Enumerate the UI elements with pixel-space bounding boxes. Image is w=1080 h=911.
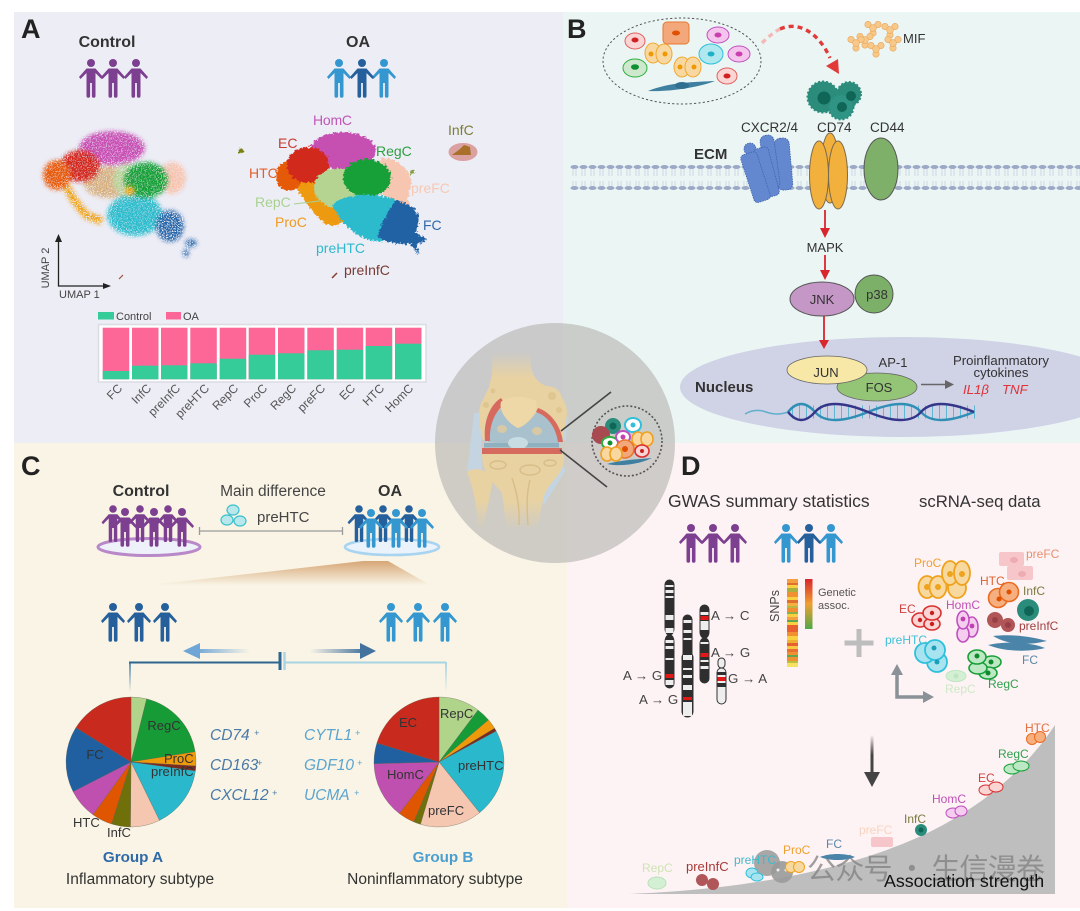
cell: HomC (946, 598, 980, 642)
rank: ProC: ProC (783, 843, 811, 857)
UMAP cluster labels: EC (278, 135, 297, 151)
arrows: pathway (820, 210, 830, 342)
legend: Control (116, 311, 151, 323)
receptor labels: CD74 (817, 120, 852, 135)
pie labels: group A: InfC (107, 825, 131, 840)
cell: RepC (945, 670, 976, 696)
label: MAPK: MAPK (807, 240, 844, 255)
UMAP cluster labels: preHTC (316, 240, 365, 256)
lines to cell cluster (560, 392, 611, 487)
UMAP axes (40, 234, 111, 301)
complex: AP-1 (787, 355, 917, 401)
icon: group B people (379, 603, 457, 642)
pie labels: group B: preHTC (458, 758, 504, 773)
complex: AP-1: AP-1 (879, 355, 907, 370)
UMAP cluster labels: FC (423, 217, 442, 233)
femur texture (483, 388, 562, 413)
dashed cell cluster (603, 18, 761, 104)
ranked cell types on curve (642, 721, 1050, 890)
watermark: 公众号 · 生信漫卷 (807, 846, 1045, 888)
panel letter B: B (567, 14, 586, 44)
UMAP axes: UMAP 1 (59, 289, 100, 301)
rank: preFC: preFC (859, 823, 893, 837)
ligaments (467, 413, 568, 505)
text: proinflammatory cytokines (953, 353, 1049, 380)
UMAP cluster labels: preFC (411, 180, 450, 196)
icon: control people (79, 59, 148, 98)
label: MIF: MIF (903, 31, 925, 46)
cell: RegC (968, 650, 1019, 691)
heading: Control: Control (113, 483, 169, 500)
gene list: group B: UCMA (304, 787, 350, 804)
cell: ProC: ProC (914, 556, 942, 570)
panel B: signalling pathway (567, 14, 1080, 437)
label: Noninflammatory subtype: Noninflammatory subtype (347, 871, 523, 888)
pie labels: group B: EC (399, 715, 417, 730)
icon: group A people (101, 603, 177, 642)
label: Group B: Group B (413, 849, 473, 866)
RepC leader line (294, 201, 320, 204)
rank: RepC: RepC (642, 861, 673, 875)
bracket: left (129, 652, 280, 692)
arrow: right (310, 643, 376, 659)
rank: preHTC (734, 853, 776, 881)
legend: genetic association: Genetic (818, 587, 856, 599)
cell: FC: FC (1022, 653, 1038, 667)
receptor: CD44 (864, 138, 898, 200)
control preInfC mark (119, 275, 123, 279)
label: SNPs: SNPs (768, 590, 782, 622)
variant labels (623, 608, 767, 707)
meniscus (484, 437, 559, 449)
rank: RegC: RegC (998, 747, 1029, 761)
nucleus (680, 337, 1080, 437)
icon: OA people (774, 524, 843, 563)
femur (479, 352, 567, 440)
panel letter C: C (21, 451, 40, 481)
UMAP cluster labels (249, 112, 474, 278)
text: proinflammatory cytokines: Proinflammatory (953, 353, 1049, 368)
pie labels: group A: HTC (73, 815, 100, 830)
UMAP cluster labels: ProC (275, 214, 307, 230)
cell: preHTC: preHTC (885, 633, 927, 647)
rank: preInfC: preInfC (686, 859, 729, 874)
InfC highlight (448, 143, 478, 161)
pie labels: group B (387, 706, 504, 818)
pie labels: group A: RegC (147, 718, 181, 733)
UMAP cluster labels: HTC (249, 165, 278, 181)
cell: FC (988, 635, 1047, 667)
icon: preHTC cells (221, 505, 246, 526)
legend: genetic association (805, 579, 856, 629)
UMAP cluster labels: RegC (376, 143, 412, 159)
complex: AP-1: FOS (866, 380, 893, 395)
stacked bar chart: RegC (268, 381, 299, 413)
receptor: CXCR2/4 (740, 134, 793, 204)
stacked bar chart: HomC (382, 381, 416, 415)
cell: InfC (1017, 584, 1045, 621)
legend: genetic association: assoc. (818, 600, 850, 612)
panel: C background (14, 443, 567, 908)
kinase: p38 (855, 275, 893, 313)
UMAP cluster labels: RepC (255, 194, 291, 210)
heading: OA: OA (346, 34, 370, 51)
gene list: group A: + (254, 728, 259, 738)
stacked bar chart: preFC (295, 381, 328, 415)
icon: OA people (327, 59, 396, 98)
synovium red (485, 398, 563, 442)
heatmap: SNPs (787, 579, 798, 667)
cell: preHTC (885, 633, 947, 672)
rank: HomC (932, 792, 967, 818)
rank: HTC: HTC (1025, 721, 1050, 735)
rank: EC: EC (978, 771, 995, 785)
cell: HTC: HTC (980, 574, 1005, 588)
pie chart: group B (374, 697, 504, 827)
icon: axes (891, 664, 934, 703)
arrow: to cytokines (921, 380, 954, 389)
cell: HomC: HomC (946, 598, 980, 612)
receptor labels (741, 120, 905, 135)
text: IL1β TNF: IL1β (963, 382, 989, 397)
gene list: group A: CXCL12 (210, 787, 269, 804)
pie labels: group A (73, 718, 194, 840)
chromosome 4 (717, 658, 726, 704)
heading: OA: OA (378, 483, 402, 500)
UMAP cluster labels: preInfC (344, 262, 390, 278)
tibia (482, 452, 564, 530)
panel: A background (14, 12, 564, 443)
trapezoid zoom wedge (150, 561, 430, 585)
panel letter D: D (681, 451, 700, 481)
text: IL1β TNF (963, 382, 1029, 397)
central knee illustration (435, 323, 675, 563)
rank: preFC (859, 823, 893, 847)
stacked bar chart: ProC (241, 381, 270, 410)
icon: MIF trimers (848, 21, 901, 57)
rank: HTC (1025, 721, 1050, 744)
UMAP cluster labels: HomC (313, 112, 352, 128)
red band (482, 448, 562, 454)
group: OA cohort (345, 505, 439, 555)
pie labels: group B: preFC (428, 803, 464, 818)
label: Group A: Group A (103, 849, 163, 866)
rank: HomC: HomC (932, 792, 966, 806)
icon: DNA helix (745, 404, 975, 420)
gene list: group B (304, 727, 362, 804)
group: control cohort (98, 505, 200, 556)
cartilage islands (497, 425, 542, 435)
panel D: GWAS integration (623, 451, 1060, 894)
rank: FC (820, 837, 855, 860)
chromosome 2 (682, 615, 693, 717)
label: Inflammatory subtype: Inflammatory subtype (66, 871, 214, 888)
tibia texture (490, 460, 556, 525)
icon: plus (844, 629, 874, 657)
receptor labels: CXCR2/4 (741, 120, 799, 135)
UMAP cluster labels: InfC (448, 122, 474, 138)
rank: FC: FC (826, 837, 842, 851)
pie labels: group A: preInfC (151, 764, 194, 779)
gene list: group A: + (272, 788, 277, 798)
chromosomes (623, 580, 767, 717)
cell: InfC: InfC (1023, 584, 1045, 598)
text: proinflammatory cytokines: cytokines (974, 365, 1029, 380)
rank: preInfC (686, 859, 729, 890)
cartilage (488, 407, 559, 444)
legend: OA (183, 311, 200, 323)
association strength curve (628, 725, 1055, 894)
heading: GWAS: GWAS summary statistics (668, 491, 870, 511)
cell: EC (899, 602, 941, 630)
stacked bar chart: preHTC (173, 381, 212, 421)
panel: D background (567, 443, 1080, 908)
kinase: JNK (790, 282, 854, 316)
chromosome 1 (665, 580, 674, 688)
stacked bar chart: preInfC (145, 381, 183, 419)
preInfC mark (332, 273, 337, 278)
variant labels: A → G (639, 692, 678, 707)
panel: B background (563, 12, 1080, 443)
stacked bar chart (98, 324, 426, 421)
gene list: group B: + (357, 758, 362, 768)
cell: ProC (914, 556, 970, 598)
variant labels: A → G (623, 668, 662, 683)
complex: AP-1: JUN (813, 365, 839, 380)
pie labels: group B: HomC (387, 767, 424, 782)
rank: InfC: InfC (904, 812, 926, 826)
UMAP: OA scatter (238, 132, 427, 255)
UMAP: control soft underlay (46, 134, 183, 232)
label: ECM: ECM (694, 146, 727, 163)
cell: HTC (980, 574, 1018, 608)
label: Association strength: Association strength (884, 871, 1044, 891)
gene list: group A: + (257, 758, 262, 768)
heading: Main difference: Main difference (220, 483, 326, 500)
kinase: JNK: JNK (810, 292, 835, 307)
gene list: group A (210, 727, 277, 804)
arrow: down (864, 735, 880, 787)
stacked bar chart: InfC (129, 381, 154, 407)
panel letter A: A (21, 14, 40, 44)
fibula (467, 469, 493, 529)
rank: preHTC: preHTC (734, 853, 776, 867)
icon: macrophage ligand cluster (808, 82, 861, 120)
rank: RegC (998, 747, 1029, 774)
stacked bar chart: FC (104, 381, 125, 402)
pie labels: group A: FC (86, 747, 104, 762)
arrow: dashed red secretion (762, 26, 839, 74)
gene list: group B: CYTL1 (304, 727, 352, 744)
cell: RepC: RepC (945, 682, 976, 696)
label: Nucleus: Nucleus (695, 379, 753, 396)
cell type map (885, 547, 1060, 696)
grey circle (435, 323, 675, 563)
patella (501, 397, 537, 428)
icon: control people (679, 524, 747, 563)
cell: preInfC (987, 612, 1059, 633)
pie chart: group A (66, 697, 196, 827)
UMAP: control scatter (43, 131, 197, 257)
cell: EC: EC (899, 602, 916, 616)
gene list: group B: + (354, 788, 359, 798)
membrane (570, 160, 1080, 196)
panel C: patient subtypes (21, 451, 523, 888)
variant labels: A → G (711, 645, 750, 660)
kinase: p38: p38 (866, 287, 888, 302)
arrow: left (183, 643, 250, 659)
rank: InfC (904, 812, 927, 836)
cell: preFC (999, 547, 1060, 580)
chromosome 3 (700, 605, 709, 683)
heading: Control: Control (79, 34, 135, 51)
stacked bar chart: EC (336, 381, 358, 403)
label: preHTC: preHTC (257, 509, 310, 526)
legend (98, 311, 200, 323)
gene list: group A: CD163 (210, 757, 259, 774)
stacked bar chart: HTC (360, 381, 387, 409)
pie labels: group A: ProC (164, 751, 194, 766)
rank: ProC (783, 843, 811, 872)
variant labels: A → C (711, 608, 750, 623)
heading: scRNA-seq: scRNA-seq data (919, 492, 1041, 511)
cell: preInfC: preInfC (1019, 619, 1059, 633)
bracket: right (284, 652, 447, 692)
dashed cell cluster (592, 406, 662, 476)
stacked bar chart: RepC (210, 381, 241, 413)
UMAP axes: UMAP 2 (40, 248, 52, 288)
cell: preFC: preFC (1026, 547, 1060, 561)
gene list: group A: CD74 (210, 727, 250, 744)
rank: EC (978, 771, 1003, 795)
variant labels: G → A (728, 671, 767, 686)
cell: RegC: RegC (988, 677, 1019, 691)
gene list: group B: GDF10 (304, 757, 354, 774)
text: IL1β TNF: TNF (1002, 382, 1029, 397)
connector: control to OA (200, 527, 342, 535)
receptor labels: CD44 (870, 120, 905, 135)
rank: RepC (642, 861, 673, 889)
gene list: group B: + (355, 728, 360, 738)
arrow: into nucleus (819, 340, 829, 349)
pie labels: group B: RepC (440, 706, 473, 721)
panel A: UMAP and proportions (21, 14, 478, 421)
receptor: CD74 (810, 133, 848, 209)
